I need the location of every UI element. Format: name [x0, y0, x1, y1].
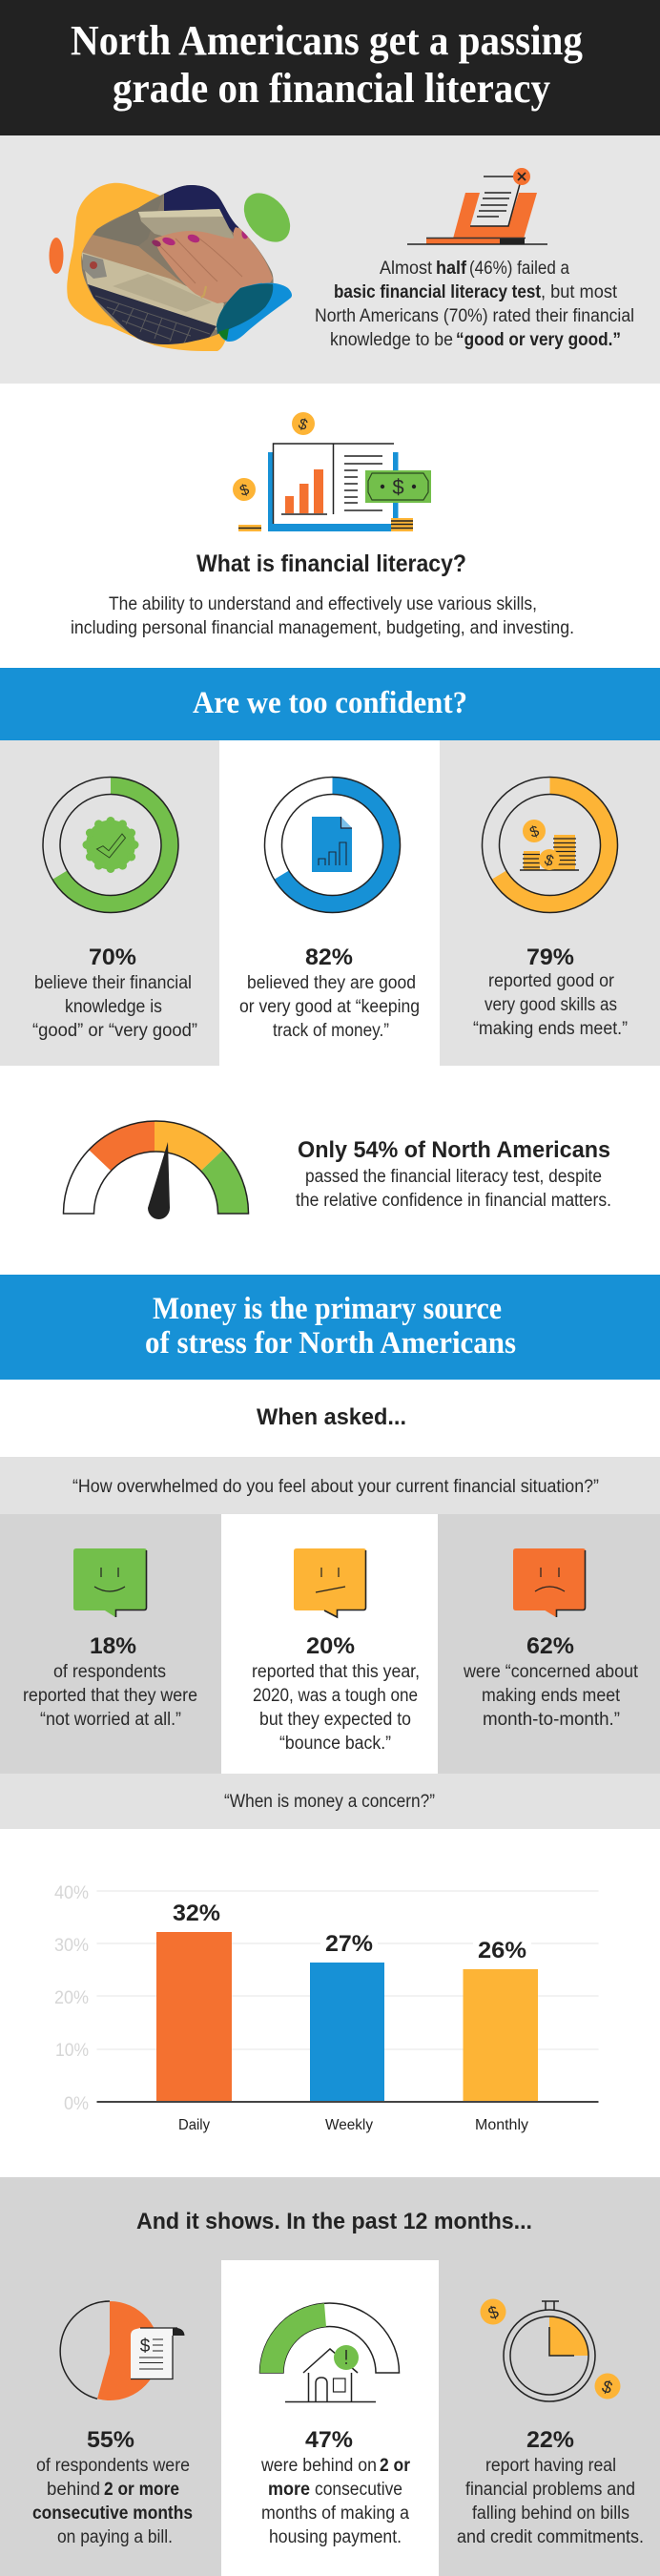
text: 22 percent caption: financial problems and: [465, 2480, 635, 2500]
donut chart: 82 percent blue: [265, 777, 401, 912]
text: 62 percent caption: were “concerned about: [463, 1662, 639, 1682]
text: 55 percent caption: on paying a bill.: [57, 2527, 173, 2547]
icon: coin stacks: $: [527, 823, 542, 841]
y axis labels: 30%: [54, 1936, 89, 1956]
bar: daily 32 percent: 32%: [173, 1901, 220, 1926]
text: intro paragraph: (46%) failed a: [469, 259, 569, 279]
text: definition: The ability to understand and effectively use various skills,: [109, 594, 537, 614]
text: 70 percent caption: [32, 945, 197, 1041]
text: 47 percent caption: 47%: [305, 2427, 353, 2453]
banner: are we too confident: [0, 668, 660, 740]
stat: 82 percent: [239, 777, 420, 1041]
text: intro paragraph: [315, 259, 634, 350]
icon: report with bar chart, coins and bill: [233, 412, 431, 531]
text: 20 percent caption: 2020, was a tough one: [253, 1686, 418, 1706]
bar: weekly 27 percent: [310, 1931, 384, 2133]
banner: money is the primary source of stress: [0, 1275, 660, 1380]
text: 79 percent caption: reported good or: [488, 971, 615, 991]
stat: 70 percent: [32, 777, 197, 1041]
icon: failed test document on laptop: [407, 168, 547, 244]
icon: report with bar chart, coins and bill: $: [392, 475, 404, 499]
text: 47 percent caption: 2 or: [380, 2456, 411, 2476]
bar: monthly 26 percent: 26%: [478, 1938, 526, 1963]
stat: 20 percent: [252, 1548, 420, 1754]
text: 47 percent caption: consecutive: [315, 2480, 402, 2500]
text: intro paragraph: Almost: [380, 259, 433, 279]
text: 79 percent caption: [473, 945, 628, 1039]
text: 18 percent caption: [23, 1633, 197, 1730]
text: intro paragraph: knowledge to be: [330, 330, 453, 350]
text: intro paragraph: , but most: [541, 282, 618, 302]
text: 18 percent caption: 18%: [90, 1633, 136, 1659]
icon: stopwatch with coins: [481, 2299, 620, 2401]
icon: arc gauge with house: [259, 2303, 399, 2402]
text: intro paragraph: “good or very good.”: [456, 330, 621, 350]
text: 55 percent caption: behind: [47, 2480, 100, 2500]
stat: 62 percent: [463, 1548, 639, 1730]
text: 70 percent caption: knowledge is: [65, 997, 162, 1017]
text: 20 percent caption: 20%: [306, 1633, 355, 1659]
text: passed test statement: Only 54% of North Americans: [298, 1137, 610, 1163]
text: 79 percent caption: 79%: [526, 945, 574, 970]
text: 22 percent caption: and credit commitments.: [457, 2527, 644, 2547]
stat: 22 percent: [457, 2299, 644, 2547]
question band: when is money a concern: [0, 1774, 660, 1829]
text: passed test statement: passed the financial literacy test, despite: [305, 1167, 602, 1187]
icon: sad speech bubble: [513, 1548, 586, 1617]
title: grade on financial literacy: [113, 65, 550, 112]
text: 62 percent caption: making ends meet: [482, 1686, 621, 1706]
text: 70 percent caption: believe their financial: [34, 973, 192, 993]
icon: coin stacks: [520, 820, 579, 870]
y axis labels: [54, 1883, 89, 2114]
text: 20 percent caption: [252, 1633, 420, 1754]
text: intro paragraph: North Americans (70%) rated their financial: [315, 306, 634, 326]
heading: what is financial literacy: What is financial literacy?: [196, 551, 466, 577]
banner: money is the primary source of stress: of stress for North Americans: [145, 1326, 516, 1361]
text: 18 percent caption: “not worried at all.”: [40, 1710, 181, 1730]
stat: 47 percent: [259, 2303, 411, 2547]
text: 79 percent caption: “making ends meet.”: [473, 1019, 628, 1039]
bar: daily 32 percent: [156, 1901, 232, 2133]
text: 20 percent caption: reported that this year,: [252, 1662, 420, 1682]
panel: overwhelmed responses: [0, 1514, 660, 1774]
bar: daily 32 percent: Daily: [178, 2117, 210, 2133]
title: [71, 17, 583, 112]
text: 22 percent caption: 22%: [526, 2427, 574, 2453]
text: definition: including personal financial management, budgeting, and investing.: [71, 618, 574, 638]
icon: report with bar chart, coins and bill: $: [237, 482, 252, 500]
y axis labels: 20%: [54, 1988, 89, 2008]
banner: money is the primary source of stress: Money is the primary source: [153, 1292, 502, 1326]
icon: coin stacks: $: [542, 852, 556, 870]
icon: stopwatch with coins: $: [485, 2302, 501, 2323]
illustration: photo of hand holding phone over laptop with colour blobs: [50, 181, 299, 351]
icon: pie chart with bill: [60, 2301, 184, 2400]
question band: when is money a concern: “When is money a concern?”: [224, 1792, 435, 1812]
icon: verified badge: [82, 817, 139, 873]
text: 55 percent caption: 55%: [87, 2427, 134, 2453]
icon: report with bar chart, coins and bill: $: [296, 416, 310, 434]
text: 70 percent caption: “good” or “very good”: [32, 1021, 197, 1041]
icon: blue report document: [312, 817, 352, 872]
text: 22 percent caption: [457, 2427, 644, 2547]
title: North Americans get a passing: [71, 17, 583, 64]
stat: 18 percent: [23, 1548, 197, 1730]
banner: are we too confident: Are we too confident?: [193, 686, 467, 720]
panel: what is financial literacy: [0, 384, 660, 668]
panel: and it shows: [0, 2177, 660, 2576]
question band: how overwhelmed: [0, 1457, 660, 1514]
text: 55 percent caption: consecutive months: [32, 2503, 193, 2524]
text: 62 percent caption: [463, 1633, 639, 1730]
text: intro paragraph: half: [436, 259, 467, 279]
stat: 55 percent: [32, 2301, 193, 2547]
icon: stopwatch with coins: $: [600, 2377, 615, 2398]
text: 20 percent caption: but they expected to: [259, 1710, 411, 1730]
panel: intro: [0, 135, 660, 384]
donut chart: 70 percent green: [43, 777, 178, 912]
text: 47 percent caption: months of making a: [261, 2503, 409, 2524]
text: passed test statement: [296, 1137, 611, 1211]
text: 18 percent caption: reported that they were: [23, 1686, 197, 1706]
text: 62 percent caption: month-to-month.”: [483, 1710, 620, 1730]
text: 20 percent caption: “bounce back.”: [279, 1734, 391, 1754]
bar chart: when money is a concern: [54, 1883, 599, 2133]
panel: confidence statistics: [0, 740, 660, 1066]
text: 82 percent caption: believed they are good: [247, 973, 416, 993]
text: 47 percent caption: [260, 2427, 411, 2547]
question band: how overwhelmed: “How overwhelmed do you feel about your current financial situation?”: [72, 1477, 599, 1497]
text: 82 percent caption: track of money.”: [273, 1021, 389, 1041]
text: 47 percent caption: more: [268, 2480, 310, 2500]
icon: pie chart with bill: $: [140, 2337, 151, 2357]
icon: happy speech bubble: [73, 1548, 147, 1617]
text: 70 percent caption: 70%: [89, 945, 136, 970]
text: intro paragraph: basic financial literacy test: [334, 282, 542, 302]
text: definition: [71, 594, 574, 638]
y axis labels: 0%: [64, 2094, 89, 2114]
bar: monthly 26 percent: [464, 1938, 538, 2133]
stat: 79 percent: [473, 777, 628, 1039]
y axis labels: 40%: [54, 1883, 89, 1903]
panel: 54 percent passed: [63, 1121, 611, 1219]
text: passed test statement: the relative confidence in financial matters.: [296, 1191, 611, 1211]
text: 82 percent caption: 82%: [305, 945, 353, 970]
text: 82 percent caption: [239, 945, 420, 1041]
bar: monthly 26 percent: Monthly: [475, 2117, 528, 2133]
bar: weekly 27 percent: 27%: [325, 1931, 373, 1957]
gauge chart: [63, 1121, 248, 1219]
text: 47 percent caption: were behind on: [260, 2456, 377, 2476]
y axis labels: 10%: [55, 2041, 89, 2061]
text: 55 percent caption: [32, 2427, 193, 2547]
text: 47 percent caption: housing payment.: [269, 2527, 402, 2547]
panel: header: [0, 0, 660, 135]
text: 22 percent caption: falling behind on bills: [472, 2503, 629, 2524]
bar: weekly 27 percent: Weekly: [325, 2117, 373, 2133]
text: 79 percent caption: very good skills as: [485, 995, 617, 1015]
text: 55 percent caption: of respondents were: [36, 2456, 190, 2476]
heading: when asked: When asked...: [257, 1404, 406, 1430]
text: 62 percent caption: 62%: [526, 1633, 574, 1659]
icon: neutral speech bubble: [294, 1548, 366, 1617]
text: 55 percent caption: 2 or more: [104, 2480, 179, 2500]
heading: and it shows: And it shows. In the past 12 months...: [136, 2209, 532, 2234]
donut chart: 79 percent yellow: [483, 777, 618, 912]
text: 18 percent caption: of respondents: [53, 1662, 166, 1682]
text: 22 percent caption: report having real: [485, 2456, 616, 2476]
text: 82 percent caption: or very good at “keeping: [239, 997, 420, 1017]
